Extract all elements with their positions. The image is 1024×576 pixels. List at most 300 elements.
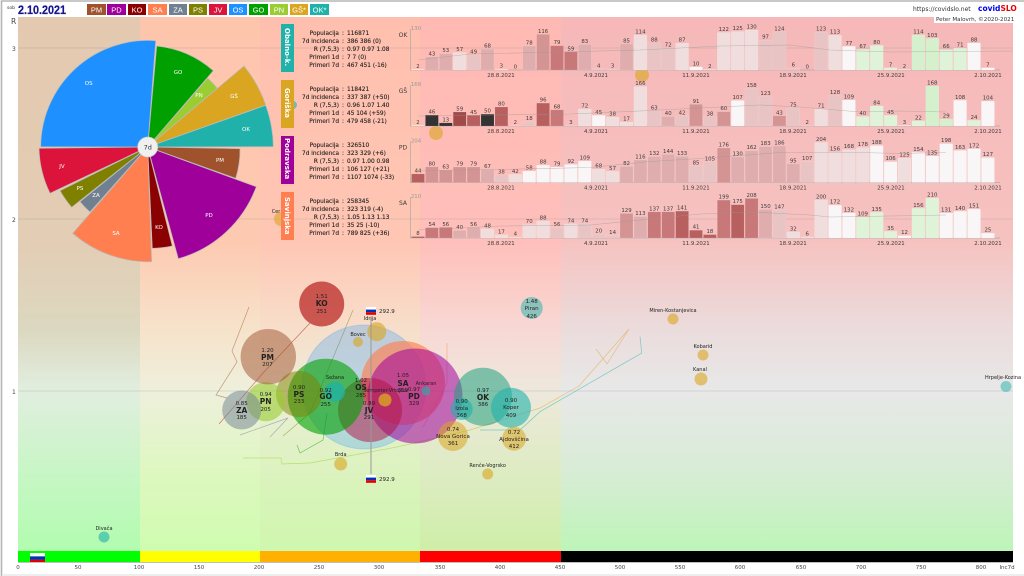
stats: 7 7 (0) [347,55,366,61]
stats: 116871 [347,31,369,37]
stats: 789 825 (+36) [347,231,390,237]
bubble labels: 1.02 [355,378,367,384]
x axis: 300 [374,565,385,571]
bar chart: SA daily cases: 4.9.2021 [584,241,608,247]
bubble labels: 0.85 [236,401,248,407]
bubble labels: Miren-Kostanjevica [649,308,697,314]
bar chart: PD daily cases: 163 [955,145,965,151]
bar chart: PD daily cases: 80 [428,161,436,167]
bar chart: GŠ daily cases: 75 [790,103,797,109]
bar chart: OK daily cases: 80 [873,40,881,46]
bubble: Nova Gorica [438,421,468,451]
bar chart: GŠ daily cases: 128 [830,90,841,96]
bubble labels: Renče-Vogrsko [469,462,506,469]
region tag: Podravska [283,138,291,180]
stats: : [342,39,344,45]
stats: Primeri 7d [309,63,339,69]
bar chart: PD daily cases: 105 [705,156,715,162]
bar chart: GŠ daily cases: 2 [514,120,517,126]
bar chart: PD daily cases: 186 [774,140,785,146]
bar chart: GŠ daily cases: 2.10.2021 [974,129,1002,135]
x axis: 700 [856,565,867,571]
bubble labels: 255 [320,402,331,408]
stats: 0.96 1.07 1.40 [347,103,390,109]
bubble chart: R vs 7d incidence [95,209,1021,542]
stats: 7d incidenca [302,151,339,157]
bubble labels: 0.90 [456,399,468,405]
stats: 106 127 (+21) [347,167,390,173]
bar chart: SA daily cases: 132 [844,207,854,213]
bubble labels: Cer [272,209,281,215]
bar chart: SA daily cases: 48 [484,223,492,229]
region tag: Savinjska [283,197,291,235]
bar chart: PD daily cases: 176 [719,142,730,148]
bar chart: PD daily cases: 57 [609,166,616,172]
stats: 35 25 (-10) [347,223,379,229]
bar chart: OK daily cases: 66 [943,44,950,50]
stats: Populacija [310,143,339,149]
bubble: JV [338,378,402,442]
bar chart: GŠ daily cases: 45 [887,110,894,116]
bar chart: GŠ daily cases: 13 [442,117,449,123]
region tag: Obalno-k. [283,28,291,66]
bar chart: GŠ daily cases: 80 [498,102,505,108]
stats: 7d incidenca [302,95,339,101]
bubble labels: 1.05 [397,373,410,379]
stats: 118421 [347,87,369,93]
stats: : [342,215,344,221]
pie chart: 7d cases by region: 7d [144,144,152,152]
legend: PS [193,6,203,14]
bar chart: GŠ daily cases: 91 [693,99,699,105]
stats: Populacija [310,199,339,205]
bar chart: PD daily cases: 106 [885,156,896,162]
bar chart: SA daily cases: 25 [984,228,991,234]
bar chart: OK daily cases: 72 [665,42,672,48]
bar chart: OK daily cases: 4.9.2021 [584,73,608,79]
bubble labels: SA [397,379,409,388]
bubble: SA [361,341,445,425]
icon: Slovenia flag [30,553,45,562]
bubble: Izola [451,398,473,420]
region tag [281,136,294,184]
stats: Populacija [310,31,339,37]
bar chart: OK daily cases: 97 [762,35,769,41]
panel: Obalno-kraška [281,24,1013,79]
bar chart: SA daily cases: 18 [706,229,714,235]
bar chart: PD daily cases: 25.9.2021 [877,186,905,192]
bar chart: SA daily cases: 56 [554,222,561,228]
x axis: 800 [976,565,987,571]
bar chart: OK daily cases: 87 [679,38,686,44]
bar chart: SA daily cases: 35 [887,226,894,232]
bar chart: GŠ daily cases: 43 [776,110,783,116]
bar chart: OK daily cases: 0 [805,64,809,70]
bar chart: GŠ daily cases: 18 [526,116,533,122]
stats: 45 104 (+59) [347,111,386,117]
bar chart: OK daily cases: 83 [581,39,588,45]
pie chart: 7d cases by region: PD [205,213,213,219]
bubble labels: 409 [506,413,517,419]
stats: : [342,167,344,173]
bubble: OS [302,325,426,449]
bubble labels: OK [477,393,490,402]
bar chart: GŠ daily cases: 28.8.2021 [487,129,515,135]
bar chart: OK daily cases: 88 [651,37,658,43]
bar chart: OK daily cases: 3 [500,64,503,70]
stats: : [342,151,344,157]
bubble labels: Ajdovščina [499,436,529,443]
panel: Savinjska [281,192,1002,247]
bar chart: GŠ daily cases: 40 [859,111,867,117]
stats: R (7,5,3) [314,47,339,53]
bar chart: PD daily cases: 109 [580,156,591,162]
legend: KO [132,6,143,14]
bar chart: GŠ daily cases: 68 [554,104,561,110]
national reference line and flags: 292.9 [379,477,395,483]
x axis: 600 [735,565,746,571]
bar chart: GŠ daily cases: 96 [540,98,547,104]
x axis: 750 [916,565,927,571]
x axis: 0 [16,565,20,571]
date header: 2.10.2021 [18,5,67,17]
bar chart: SA daily cases: 18.9.2021 [779,241,807,247]
legend: OS [233,6,243,14]
bubble labels: Brda [335,452,347,458]
bubble labels: 0.89 [363,401,376,407]
bubble: PN [246,382,285,421]
bar chart: PD daily cases: 127 [983,152,993,158]
bar chart: PD daily cases: 198 [941,138,952,144]
bar chart: GŠ daily cases: 2 [416,120,420,126]
pie chart: 7d cases by region: SA [112,231,120,237]
legend: OK* [313,6,326,14]
bubble labels: 329 [409,401,420,407]
region tag [281,80,294,128]
incidence colour scale [18,551,1013,562]
bubble labels: 0.72 [508,430,520,436]
x axis: 450 [555,565,566,571]
y axis labels: 1 [12,389,16,396]
bar chart: PD daily cases: 204 [411,138,422,144]
pie chart: 7d cases by region: KO [155,225,163,231]
bar chart: PD daily cases: 92 [567,159,574,165]
bar chart: SA daily cases: 156 [913,203,924,209]
pie chart: 7d cases by region: GO [174,70,183,76]
bubble labels: JV [364,406,373,415]
bar chart: OK daily cases: 18.9.2021 [779,73,807,79]
bar chart: PD daily cases: 130 [733,152,743,158]
bar chart: GŠ daily cases: 17 [623,116,630,122]
pie chart: 7d cases by region: ZA [92,193,100,199]
bubble labels: 0.74 [447,427,460,433]
bar chart: PD daily cases: 156 [830,146,841,152]
bar chart: SA daily cases: 74 [581,218,589,224]
bar chart: OK daily cases: 114 [635,29,646,35]
stats: 323 329 (+6) [347,151,386,157]
stats: Primeri 1d [309,55,339,61]
bar chart: GŠ daily cases: 40 [665,111,672,117]
bubble: PM [241,329,296,384]
bar chart: PD daily cases: 204 [816,137,827,143]
legend: PD [111,6,122,14]
bar chart: GŠ daily cases: 11.9.2021 [682,129,710,135]
bar chart: SA daily cases: 2.10.2021 [974,241,1002,247]
bar chart: SA daily cases: 208 [746,193,757,199]
bar chart: GŠ daily cases [399,80,1002,135]
bar chart: GŠ daily cases: 63 [651,106,658,112]
pie chart: 7d cases by region [39,40,273,262]
bar chart: PD daily cases: 116 [635,154,646,160]
bar chart: OK daily cases: 11.9.2021 [682,73,710,79]
legend [87,4,329,15]
bar chart: SA daily cases: 56 [442,222,450,228]
pie chart: 7d cases by region: GŠ [230,93,238,100]
bar chart: GŠ daily cases: 42 [679,110,686,116]
stats: Populacija [310,87,339,93]
bubble labels: Kobarid [694,344,712,350]
stats: : [342,111,344,117]
bar chart: SA daily cases: 28.8.2021 [487,241,515,247]
stats: : [342,119,344,125]
bar chart: SA daily cases: 137 [663,206,673,212]
bar chart: GŠ daily cases: 123 [760,91,771,97]
bubble labels: Sežana [326,374,344,381]
bar chart: SA daily cases: 137 [649,206,659,212]
bubble: PS [276,371,322,417]
bar chart: GŠ daily cases: 25.9.2021 [877,129,905,135]
legend: PN [274,6,284,14]
x axis: 100 [134,565,145,571]
small municipality bubbles [98,314,1012,542]
bar chart: OK daily cases: 10 [693,61,700,67]
x axis: 500 [615,565,626,571]
bar chart: GŠ daily cases: 45 [595,110,602,116]
bar chart: GŠ daily cases: 3 [569,120,573,126]
bubble labels: Bovec [350,332,366,338]
bar chart: SA daily cases: 150 [760,204,771,210]
bar chart: SA daily cases: 41 [693,225,699,231]
bar chart: SA daily cases: 113 [635,211,646,217]
bar chart: SA daily cases: 25.9.2021 [877,241,905,247]
bar chart: PD daily cases [399,137,1002,192]
bar chart: PD daily cases: 79 [470,162,478,168]
bubble labels: OS [355,383,367,392]
bar chart: GŠ daily cases: 109 [844,94,855,100]
bar chart: OK daily cases: 68 [484,44,492,50]
bar chart: SA daily cases: 199 [719,195,730,201]
x axis: 350 [435,565,446,571]
bubble labels: 0.90 [293,385,306,391]
stats: 7d incidenca [302,207,339,213]
stats: R (7,5,3) [314,215,339,221]
bar chart: SA daily cases: 17 [498,229,505,235]
bar chart: SA daily cases: 32 [790,226,797,232]
bubble labels: 386 [478,402,489,408]
bar chart: PD daily cases: 162 [746,145,757,151]
stats: R (7,5,3) [314,159,339,165]
bar chart: GŠ daily cases: 104 [983,96,994,102]
bar chart: PD daily cases: 58 [526,166,533,172]
bubble: Koper [491,388,531,428]
bar chart: SA daily cases: 135 [872,207,882,213]
bar chart: GŠ daily cases: 71 [818,104,825,110]
bar chart: SA daily cases: 172 [830,200,840,206]
low-incidence background circles [274,68,649,226]
bubble labels: Šempeter-Vrtojba [363,387,407,394]
bar chart: PD daily cases: 154 [913,147,924,153]
credits: covidSLO [978,4,1017,13]
bar chart: GŠ daily cases: 38 [706,112,714,118]
bubble labels: PD [408,392,420,401]
bar chart: OK daily cases: 53 [442,48,449,54]
bar chart: GŠ daily cases: 84 [873,100,881,106]
x axis: 550 [675,565,686,571]
bubble labels: 0.90 [505,398,518,404]
stats: 479 458 (-21) [347,119,387,125]
bar chart: GŠ daily cases: 38 [609,112,617,118]
bar chart: PD daily cases: 183 [760,141,771,147]
bubble labels: PS [294,390,304,399]
bar chart: GŠ daily cases: 50 [484,109,492,115]
bar chart: OK daily cases: 130 [411,26,422,32]
pie chart: 7d cases by region: JV [58,164,65,170]
stats: : [342,143,344,149]
bubble labels: 412 [509,444,519,450]
bubble labels: Kanal [693,367,707,373]
bubble labels: 1.48 [526,299,538,305]
credits [913,4,1021,23]
stats: 323 319 (-4) [347,207,383,213]
stats: 386 386 (0) [347,39,381,45]
region tag: Goriška [283,88,291,118]
legend: SA [152,6,163,14]
legend: GŠ* [292,6,306,14]
bubble labels: 0.92 [320,388,332,394]
stats: 337 387 (+50) [347,95,390,101]
region tag [281,24,294,72]
bar chart: SA daily cases: 74 [567,218,575,224]
bar chart: GŠ daily cases: 4.9.2021 [584,129,608,135]
stats: 258345 [347,199,369,205]
bar chart: OK daily cases: 2 [903,64,906,70]
bar chart: GŠ daily cases: 168 [927,80,938,86]
bubble labels: 205 [260,407,271,413]
bar chart: PD daily cases: 107 [802,156,812,162]
bar chart: GŠ daily cases: GŠ [399,88,407,95]
bubble: PD [368,348,462,444]
y axis labels: R [11,17,16,26]
bar chart: SA daily cases: 129 [621,208,632,214]
bar chart: PD daily cases: 188 [872,140,882,146]
bar chart: OK daily cases: 124 [774,26,785,32]
bar chart: OK daily cases: 77 [845,41,852,47]
bubble labels: 291 [364,415,374,421]
bar chart: PD daily cases: 67 [484,164,491,170]
bar chart: OK daily cases: OK [399,32,408,39]
bubble labels: Piran [525,306,539,312]
bar chart: PD daily cases: 132 [649,151,659,157]
x axis: 250 [314,565,325,571]
y axis labels: 2 [12,217,16,224]
bar chart: SA daily cases: 109 [858,212,869,218]
bubble: KO [299,282,344,326]
bubble labels: 319 [398,388,409,394]
bar chart: OK daily cases: 103 [927,33,937,39]
bar chart: PD daily cases: 28.8.2021 [487,186,515,192]
bar chart: GŠ daily cases: 59 [456,106,464,112]
stats: Primeri 1d [309,111,339,117]
panel: Goriška [281,80,1002,135]
bar chart: SA daily cases: 175 [733,199,743,205]
bubble labels: 1.51 [316,294,328,300]
bubble labels: 207 [262,362,273,368]
bar chart: SA daily cases: SA [399,200,408,207]
national reference line and flags: 292.9 [379,309,395,315]
x axis: Inc7d [999,565,1015,571]
bubble labels: 285 [356,393,367,399]
bar chart: SA daily cases: 140 [955,206,966,212]
bubble labels: KO [316,299,328,308]
bubble labels: 233 [294,399,305,405]
bubble labels: Izola [455,406,468,412]
bar chart: PD daily cases: 144 [663,149,674,155]
bar chart: PD daily cases: 42 [512,169,519,175]
bar chart: OK daily cases: 2 [416,64,420,70]
bar chart: OK daily cases: 123 [816,27,826,33]
stats: : [342,207,344,213]
stats: : [342,87,344,93]
stats: : [342,159,344,165]
bubble labels: 185 [236,415,247,421]
bar chart: SA daily cases: 131 [941,208,951,214]
bar chart: OK daily cases: 125 [733,26,743,32]
stats: : [342,95,344,101]
stats: 0.97 0.97 1.08 [347,47,390,53]
bar chart: PD daily cases: 44 [415,168,422,174]
bar chart: OK daily cases: 88 [971,37,978,43]
bubble labels: PN [260,397,272,406]
bar chart: PD daily cases: 79 [554,162,561,168]
pie chart: 7d cases by region: OS [85,81,93,87]
x axis: 200 [254,565,265,571]
stats: Primeri 1d [309,167,339,173]
bubble labels: PM [261,353,274,362]
region tag [281,192,294,240]
bar chart: SA daily cases: 200 [816,194,827,200]
bubble: ZA [222,390,261,430]
bubble labels [95,209,1021,532]
stats: : [342,223,344,229]
bubble labels: Koper [503,405,520,411]
bar chart: OK daily cases: 116 [538,29,549,35]
bubble: OK [454,368,512,426]
bar chart: GŠ daily cases: 3 [903,120,906,126]
bar chart: PD daily cases: 125 [899,152,910,158]
bar chart: OK daily cases: 79 [554,40,561,46]
bar chart: OK daily cases: 57 [456,47,463,53]
bar chart: SA daily cases: 14 [609,230,617,236]
stats: : [342,31,344,37]
bar chart: SA daily cases: 88 [540,216,547,222]
stats [302,199,390,237]
bar chart: PD daily cases: 168 [844,144,855,150]
bar chart: GŠ daily cases: 158 [746,83,757,89]
bubble: Ajdovščina [502,427,526,451]
bar chart: OK daily cases: 43 [428,51,435,57]
legend: JV [214,6,222,14]
bar chart: GŠ daily cases: 168 [411,82,422,88]
